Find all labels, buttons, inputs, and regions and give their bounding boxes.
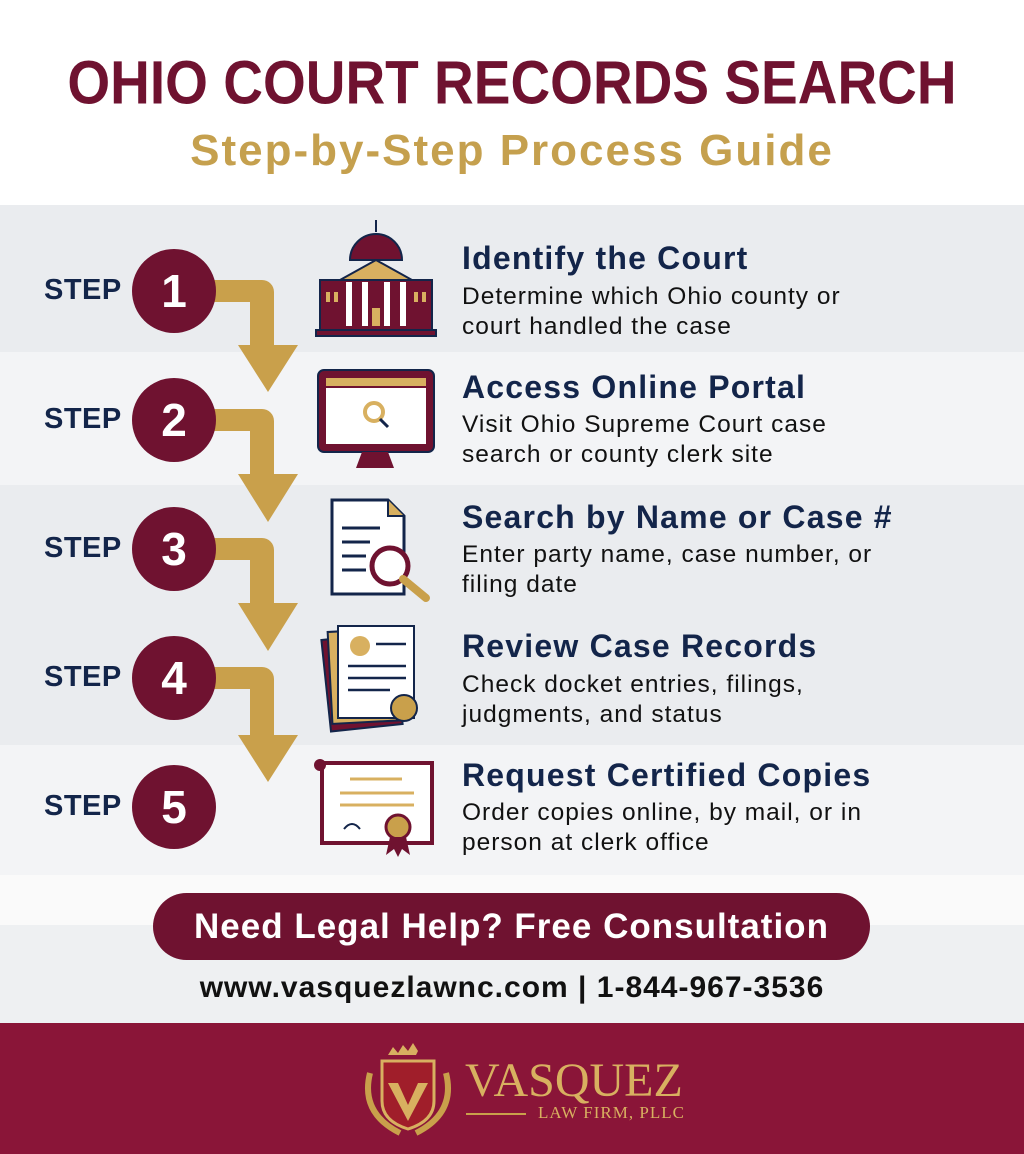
step 5 text: Request Certified Copies — [462, 757, 871, 793]
footer — [0, 1023, 1024, 1154]
step 2 text: Access Online Portal — [462, 369, 806, 405]
icon: certificate — [314, 759, 434, 857]
text: court handled the case — [462, 313, 732, 340]
text: Visit Ohio Supreme Court case — [462, 411, 827, 438]
icon: courthouse — [315, 220, 437, 337]
text: 5 — [161, 781, 187, 833]
text: Order copies online, by mail, or in — [462, 799, 862, 826]
step 4: STEP — [44, 661, 122, 693]
icon: case records — [320, 625, 418, 733]
step 2: STEP — [44, 403, 122, 435]
contact line: www.vasquezlawnc.com | 1-844-967-3536 — [200, 971, 824, 1004]
CTA button: Need Legal Help? Free Consultation — [194, 907, 829, 946]
text: judgments, and status — [462, 701, 723, 728]
background bands — [0, 205, 1024, 1023]
text: filing date — [462, 571, 578, 598]
footer: LAW FIRM, PLLC — [538, 1103, 685, 1122]
step 1 text: Identify the Court — [462, 240, 748, 276]
subtitle: Step-by-Step Process Guide — [190, 126, 834, 175]
text: 3 — [161, 523, 187, 575]
icon: monitor — [317, 369, 435, 468]
title: OHIO COURT RECORDS SEARCH — [67, 47, 957, 117]
text: 4 — [161, 652, 187, 704]
text: Check docket entries, filings, — [462, 671, 804, 698]
step 5: STEP — [44, 790, 122, 822]
text: Enter party name, case number, or — [462, 541, 872, 568]
text: person at clerk office — [462, 829, 710, 856]
step 3 text: Search by Name or Case # — [462, 499, 893, 535]
text: 2 — [161, 394, 187, 446]
text: search or county clerk site — [462, 441, 774, 468]
text: Determine which Ohio county or — [462, 283, 841, 310]
logo text: VASQUEZ — [465, 1054, 683, 1107]
step 4 text: Review Case Records — [462, 628, 817, 664]
icon: document search — [330, 498, 430, 602]
text: 1 — [161, 265, 187, 317]
step 1: STEP — [44, 274, 122, 306]
step 3: STEP — [44, 532, 122, 564]
CTA button — [153, 893, 870, 960]
logo emblem — [365, 1043, 451, 1136]
